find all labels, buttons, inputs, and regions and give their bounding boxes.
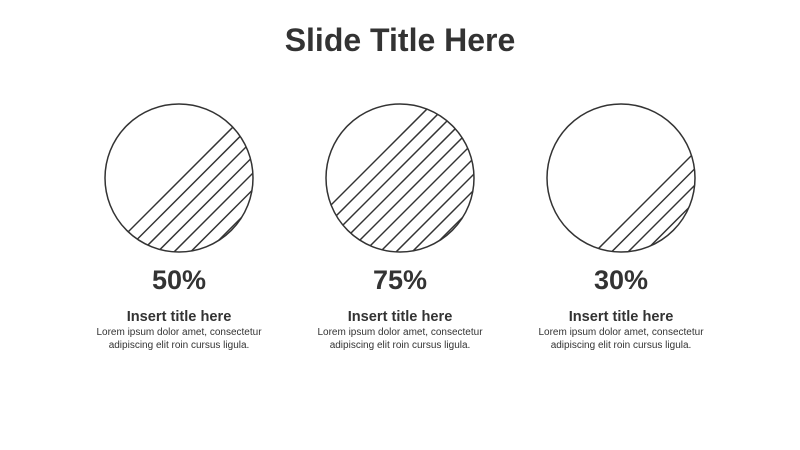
text block: 75%: 75% <box>373 265 427 295</box>
text block: 50%: Lorem ipsum dolor amet, consectetur <box>96 327 262 338</box>
text block: 30%: adipiscing elit roin cursus ligula. <box>551 340 691 351</box>
text block: 50%: 50% <box>152 265 206 295</box>
text block: 50% <box>96 265 262 351</box>
circle 30% <box>546 103 696 253</box>
title: Slide Title Here <box>285 22 515 58</box>
text block: 30%: Insert title here <box>569 309 673 325</box>
text block: 75% <box>317 265 483 351</box>
text block: 30% <box>538 265 704 351</box>
text block: 75%: adipiscing elit roin cursus ligula. <box>330 340 470 351</box>
text block: 75%: Lorem ipsum dolor amet, consectetur <box>317 327 483 338</box>
text block: 30%: Lorem ipsum dolor amet, consectetur <box>538 327 704 338</box>
text block: 75%: Insert title here <box>348 309 452 325</box>
chart: hatched circles <box>104 103 696 253</box>
text block: 50%: Insert title here <box>127 309 231 325</box>
circle 50% <box>104 103 254 253</box>
circle 75% <box>325 103 475 253</box>
text block: 30%: 30% <box>594 265 648 295</box>
text block: 50%: adipiscing elit roin cursus ligula. <box>109 340 249 351</box>
